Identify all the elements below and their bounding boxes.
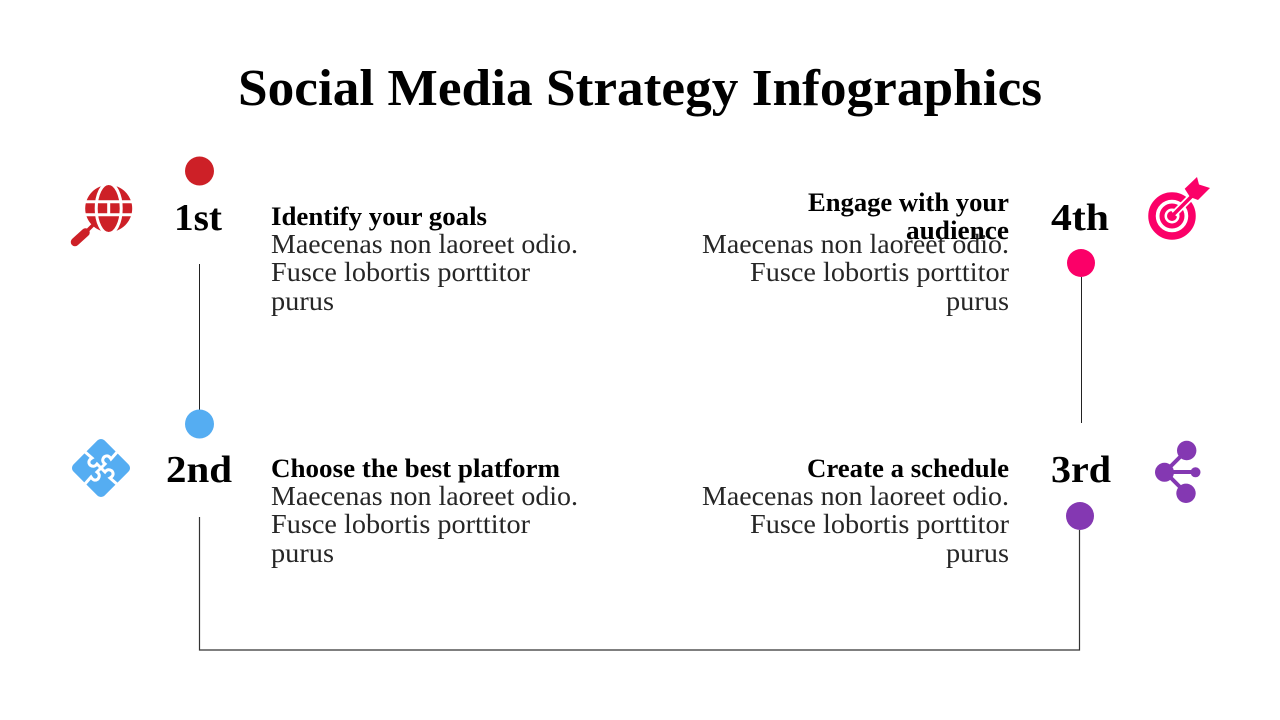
body: step 3: purus: [946, 538, 1009, 568]
body: step 2: Maecenas non laoreet odio.: [271, 481, 578, 511]
dot: step 1: [185, 156, 214, 186]
body: step 1: [271, 229, 578, 316]
body: step 3: Fusce lobortis porttitor: [750, 509, 1009, 539]
body: step 1: Fusce lobortis porttitor: [271, 257, 530, 287]
dot: step 4: [1067, 249, 1095, 277]
body: step 1: Maecenas non laoreet odio.: [271, 229, 578, 259]
text: step 1: [271, 202, 578, 316]
icon: share network: [1155, 441, 1200, 503]
title: Social Media Strategy Infographics: [238, 60, 1042, 117]
icon: globe search: [75, 184, 134, 242]
icon: target with arrow: [1152, 177, 1210, 236]
dot: step 3: [1066, 502, 1094, 530]
connector: step 1 to step 2: [198, 264, 200, 412]
connector: step 2 to step 3: [200, 517, 1080, 650]
body: step 3: [702, 481, 1009, 568]
body: step 4: Maecenas non laoreet odio.: [702, 229, 1009, 259]
body: step 1: purus: [271, 286, 334, 316]
heading: step 4: Engage with your: [808, 188, 1009, 217]
body: step 2: purus: [271, 538, 334, 568]
heading: step 4: audience: [906, 216, 1009, 245]
body: step 4: [702, 229, 1009, 316]
text: step 2: [271, 454, 578, 568]
text: step 3: [702, 454, 1009, 568]
body: step 4: purus: [946, 286, 1009, 316]
text: step 4: [702, 188, 1009, 316]
panel: step 1: [75, 156, 578, 316]
body: step 2: Fusce lobortis porttitor: [271, 509, 530, 539]
panel: step 2: [70, 410, 578, 568]
body: step 2: [271, 481, 578, 568]
heading: step 1: Identify your goals: [271, 202, 487, 231]
connector: step 3 to step 4: [1080, 277, 1082, 423]
heading: step 3: Create a schedule: [807, 454, 1009, 483]
label: 1st: 1st: [174, 197, 222, 239]
body: step 4: Fusce lobortis porttitor: [750, 257, 1009, 287]
heading: step 2: Choose the best platform: [271, 454, 560, 483]
body: step 3: Maecenas non laoreet odio.: [702, 481, 1009, 511]
icon: puzzle: [70, 437, 132, 499]
label: 4th: 4th: [1051, 197, 1109, 239]
heading: step 4: [808, 188, 1009, 245]
dot: step 2: [185, 410, 214, 438]
label: 3rd: 3rd: [1051, 449, 1111, 491]
label: 2nd: 2nd: [166, 449, 232, 491]
panel: step 4: [702, 177, 1210, 316]
panel: step 3: [702, 441, 1200, 568]
